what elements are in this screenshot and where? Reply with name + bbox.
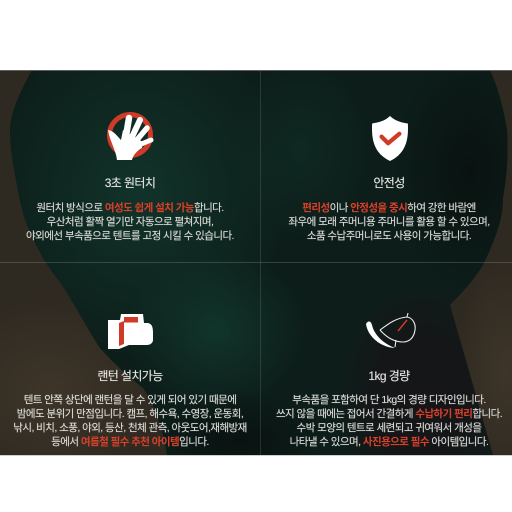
text block: 쓰지 않을 때에는 접어서 간결하게 수납하기 편리합니다. — [276, 408, 502, 420]
text block: 등에서 여름철 필수 추천 아이템입니다. — [51, 436, 209, 448]
text block: 야외에선 부속품으로 텐트를 고정 시킬 수 있습니다. — [26, 230, 234, 242]
text block: 텐트 안쪽 상단에 랜턴을 달 수 있게 되어 있기 때문에 — [24, 394, 236, 406]
text block: 낚시, 비치, 소풍, 야외, 등산, 천체 관측, 아웃도어,재해방재 — [13, 422, 247, 434]
panel: 1kg 경량 — [276, 312, 502, 448]
panel: 3초 원터치 — [26, 112, 234, 242]
ground — [0, 70, 512, 455]
icon: lantern — [108, 314, 153, 349]
text block — [26, 202, 234, 242]
text block: 소품 수납주머니로도 사용이 가능합니다. — [307, 230, 471, 242]
text block: 밤에도 분위기 만점입니다. 캠프, 해수욕, 수영장, 운동회, — [17, 408, 243, 420]
heading: 랜턴 설치가능 — [97, 369, 163, 383]
icon: feather — [366, 312, 416, 348]
heading: 안전성 — [373, 176, 405, 190]
icon: hand in prohibition circle — [107, 112, 154, 160]
panel: 안전성 — [288, 116, 490, 242]
text block — [276, 394, 502, 448]
tent body — [10, 71, 508, 455]
text block: 수박 모양의 텐트로 세련되고 귀여워서 개성을 — [297, 422, 481, 434]
text block — [288, 202, 490, 242]
background photo: tent on ground — [0, 70, 512, 456]
text block: 나타낼 수 있으며, 사진용으로 필수 아이템입니다. — [290, 436, 488, 448]
heading: 3초 원터치 — [105, 176, 155, 190]
text block: 우산처럼 활짝 열기만 자동으로 펼쳐지며, — [47, 216, 213, 228]
icon: shield with check — [372, 116, 408, 161]
panel: 랜턴 설치가능 — [13, 314, 247, 448]
text block: 좌우에 모래 주머니용 주머니를 활용 할 수 있으며, — [288, 216, 490, 228]
text block: 부속품을 포함하여 단 1kg의 경량 디자인입니다. — [292, 394, 486, 406]
text block: 원터치 방식으로 여성도 쉽게 설치 가능합니다. — [36, 202, 224, 214]
heading: 1kg 경량 — [368, 369, 410, 383]
text block: 편리성이나 안정성을 중시하여 강한 바람엔 — [302, 202, 476, 214]
text block — [13, 394, 247, 448]
